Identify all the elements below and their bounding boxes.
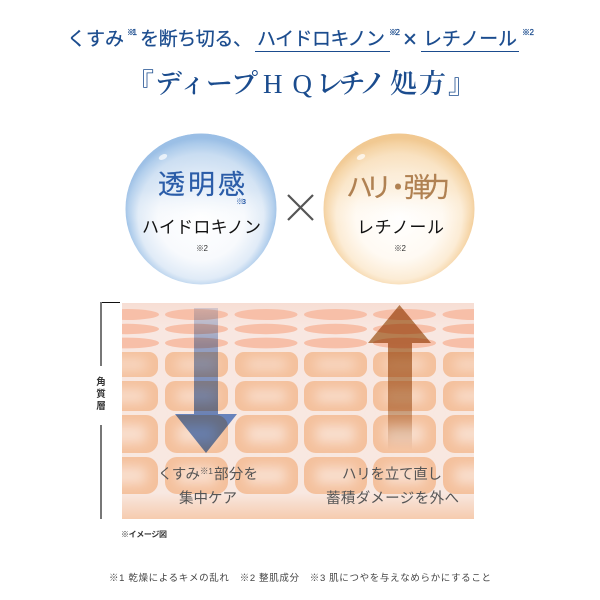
heading: subtitle line: を断ち切る、	[140, 28, 252, 50]
bubble: retinol: レチノール	[357, 218, 444, 237]
bubble: hydroquinone	[126, 134, 276, 284]
bubble: retinol	[324, 134, 474, 284]
heading: subtitle line	[67, 26, 535, 53]
heading: formula name: HQ	[263, 69, 312, 99]
arrow: up, brown	[368, 305, 431, 450]
heading: formula name: 処方	[390, 69, 446, 99]
caption: right	[326, 466, 459, 507]
multiply sign	[288, 195, 313, 220]
bubble: hydroquinone: ハイドロキノン	[142, 218, 261, 237]
heading: formula name: 』	[448, 69, 476, 100]
footnotes: ※1 乾燥によるキメの乱れ ※2 整肌成分 ※3 肌につやを与えなめらかにすること	[109, 572, 491, 584]
caption: left: 集中ケア	[179, 490, 237, 507]
caption: right: 蓄積ダメージを外へ	[326, 490, 459, 507]
bubble: retinol: ハリ・弾力	[346, 173, 450, 203]
heading: subtitle line: ハイドロキノン	[257, 29, 385, 50]
stratum corneum bracket	[96, 302, 120, 519]
caption: left	[158, 466, 258, 507]
caption: left: 部分を	[214, 466, 258, 483]
heading: formula name: レチノ	[316, 69, 386, 99]
heading: formula name: ディープ	[155, 69, 258, 99]
heading: subtitle line: ※2	[522, 28, 535, 37]
skin diagram	[122, 303, 474, 519]
bubble: hydroquinone: 透明感	[158, 170, 245, 200]
heading: formula name	[126, 68, 476, 100]
stratum corneum bracket: 角	[96, 376, 106, 388]
caption: left: ※1	[200, 466, 213, 476]
caption: left: くすみ	[158, 466, 200, 483]
note: illustrative image: ※イメージ図	[121, 530, 167, 539]
stratum corneum bracket: 層	[96, 401, 106, 412]
stratum corneum bracket: 質	[96, 388, 106, 400]
bubble: hydroquinone: ※3	[236, 197, 246, 206]
heading: subtitle line: レチノール	[423, 29, 517, 50]
heading: subtitle line: くすみ	[67, 29, 124, 50]
arrow: down, blue	[175, 308, 237, 453]
heading: subtitle line: ×	[403, 26, 417, 53]
heading: formula name: 『	[126, 68, 154, 100]
caption: right: ハリを立て直し	[342, 466, 442, 483]
heading: subtitle line: ※2	[389, 28, 401, 37]
bubble: retinol: ※2	[394, 244, 407, 253]
bubble: hydroquinone: ※2	[196, 244, 209, 253]
heading: subtitle line: ※1	[127, 28, 138, 37]
